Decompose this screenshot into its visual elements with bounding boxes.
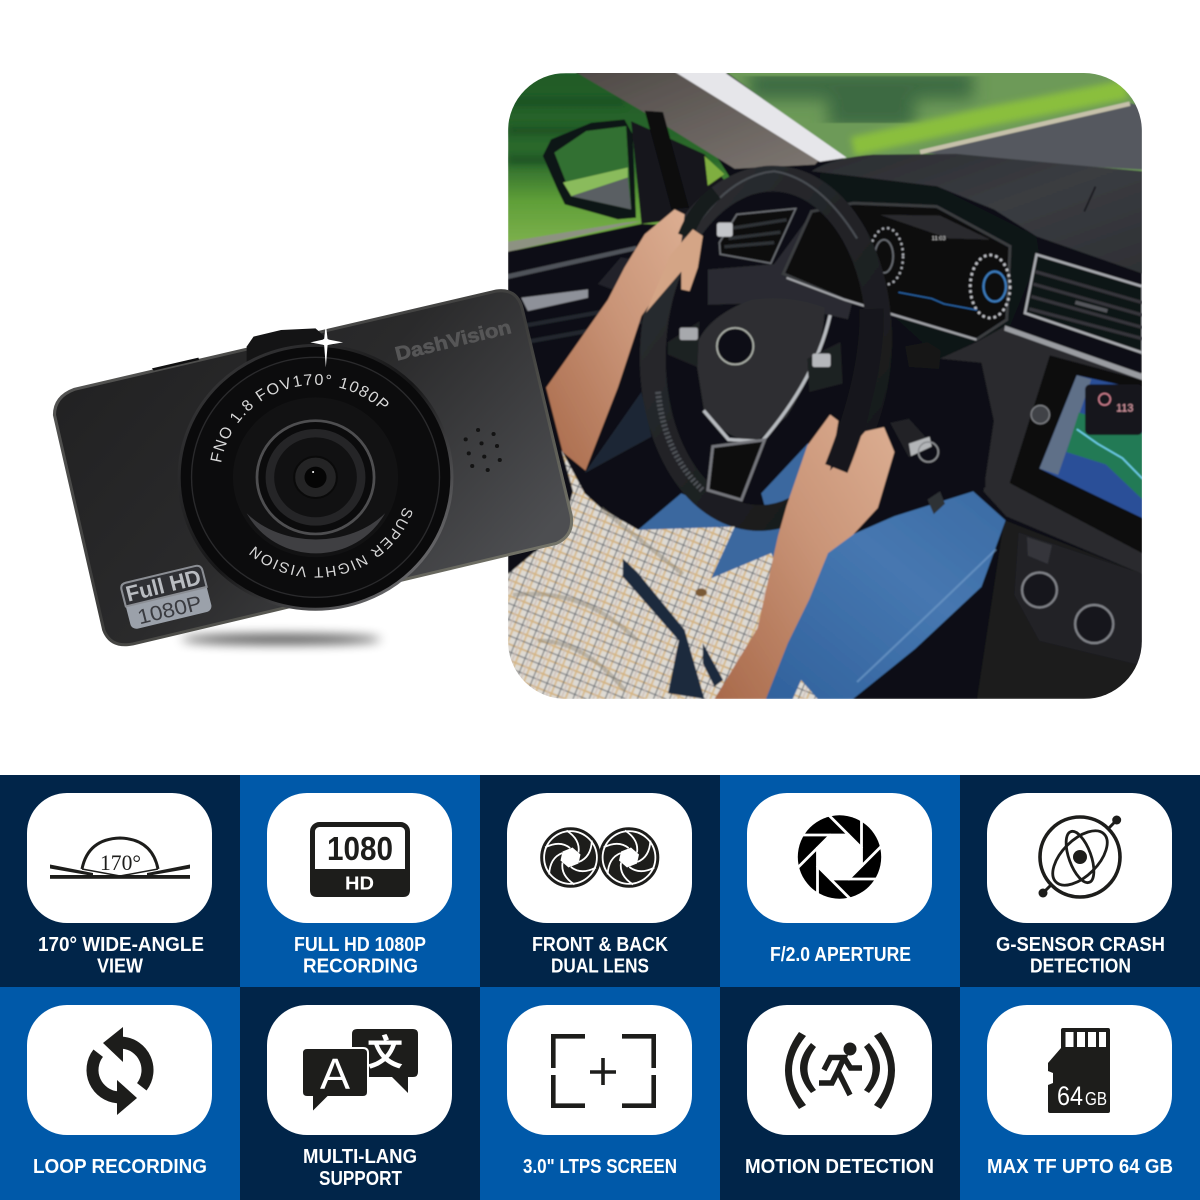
icon: gyroscope (1038, 816, 1121, 898)
windshield with motion-blurred road (720, 68, 1143, 172)
door panel (508, 224, 695, 475)
panel: motion detection (720, 987, 960, 1200)
centre vent left (708, 209, 853, 319)
shirt with plaid pattern (508, 450, 818, 699)
label: MOTION DETECTION (745, 1155, 934, 1178)
label: DUAL LENS (551, 954, 649, 978)
right arm and hand (714, 415, 894, 699)
label: DETECTION (1030, 954, 1131, 978)
panel: max TF card up to 64 GB (960, 987, 1200, 1200)
label: F/2.0 APERTURE (770, 943, 911, 966)
label (294, 933, 426, 978)
icon: loop arrows (92, 1027, 148, 1115)
lens flare (310, 323, 343, 367)
wheel rim over left hand (685, 193, 716, 236)
label: MAX TF UPTO 64 GB (987, 1155, 1173, 1178)
icon: micro SD card (1048, 1028, 1110, 1113)
instrument cluster (783, 203, 1010, 340)
wheel hub and airbag (695, 298, 825, 444)
panel: 3.0 inch LTPS screen (480, 987, 720, 1200)
label: 3.0" LTPS SCREEN (523, 1155, 677, 1178)
icon: wide angle arc (50, 838, 190, 879)
icon: micro SD card: 64 (1057, 1081, 1083, 1111)
icon: running person with signal arcs (785, 1032, 895, 1109)
wheel rim over right hand (836, 309, 872, 469)
dashboard top (811, 154, 1143, 274)
icon: micro SD card: GB (1085, 1089, 1107, 1109)
panel: loop recording (0, 987, 240, 1200)
label (532, 933, 668, 978)
camera body (54, 291, 572, 645)
camera shadow (181, 634, 381, 644)
window frame dark triangle (631, 121, 724, 224)
icon: 1080 HD (310, 824, 410, 897)
label (303, 1145, 417, 1190)
product: DashVision dash camera (52, 289, 574, 652)
label: FRONT & BACK (532, 933, 668, 956)
lens assembly (180, 344, 454, 611)
label: 170° WIDE-ANGLE (38, 933, 204, 956)
Full HD 1080P badge (120, 564, 213, 631)
label: G-SENSOR CRASH (996, 933, 1165, 956)
icon: translation bubbles: A (320, 1050, 351, 1099)
label: SUPPORT (319, 1167, 402, 1190)
infotainment screen (1010, 355, 1143, 554)
panel: G-sensor crash detection (960, 775, 1200, 987)
icon: twin lenses (542, 829, 658, 886)
left arm and hand (546, 209, 685, 471)
door lower blue-tinted panel (585, 392, 651, 473)
door mirror (543, 111, 689, 219)
lens reflection crescent (247, 513, 385, 553)
icon: 1080 HD: HD (345, 874, 374, 894)
Full HD 1080P badge: 1080P (135, 592, 204, 629)
steering wheel (641, 171, 890, 526)
label (996, 933, 1165, 978)
panel: F/2.0 aperture (720, 775, 960, 987)
lens top lettering: FNO 1.8 FOV170° 1080P (210, 374, 388, 462)
left thumb (646, 229, 703, 313)
label: VIEW (97, 954, 144, 978)
side window with blurred greenery (508, 73, 737, 252)
seatbelt (623, 558, 704, 699)
icon: screen brackets with plus (553, 1036, 654, 1106)
centre console (940, 325, 1143, 574)
climate controls (977, 520, 1143, 699)
speaker holes (464, 428, 502, 472)
instrument cluster: 11:03 (932, 236, 946, 242)
panel: front and back dual lens (480, 775, 720, 987)
photo: driver holding steering wheel in car interior (508, 68, 1143, 699)
lens bottom lettering: SUPER NIGHT VISION (249, 508, 412, 578)
infotainment screen: 113 (1116, 402, 1133, 414)
shirt button (695, 588, 707, 597)
panel: 170 degree wide-angle view (0, 775, 240, 987)
turn stalk (905, 342, 941, 369)
label: MULTI-LANG (303, 1145, 417, 1168)
Full HD 1080P badge: Full HD (123, 565, 204, 606)
panel: multi-language support (240, 987, 480, 1200)
car keys (890, 419, 945, 514)
right air vent (1025, 255, 1143, 353)
label: RECORDING (303, 954, 418, 978)
icon: 1080 HD: 1080 (327, 830, 393, 867)
icon: aperture (796, 813, 883, 901)
label: LOOP RECORDING (33, 1155, 207, 1178)
icon: translation bubbles (302, 1024, 418, 1113)
label: FULL HD 1080P (294, 933, 426, 956)
top hump and button (152, 328, 336, 371)
dark area under dashboard (816, 172, 1039, 359)
brand name: DashVision (393, 317, 514, 365)
icon: wide angle arc: 170° (100, 850, 141, 875)
pillar and white trim (568, 68, 847, 169)
green glimpse through side glass (704, 156, 724, 186)
label (38, 933, 204, 978)
panel: full HD 1080P recording (240, 775, 480, 987)
jeans (638, 443, 1005, 699)
icon: translation bubbles: 文 (367, 1024, 403, 1076)
